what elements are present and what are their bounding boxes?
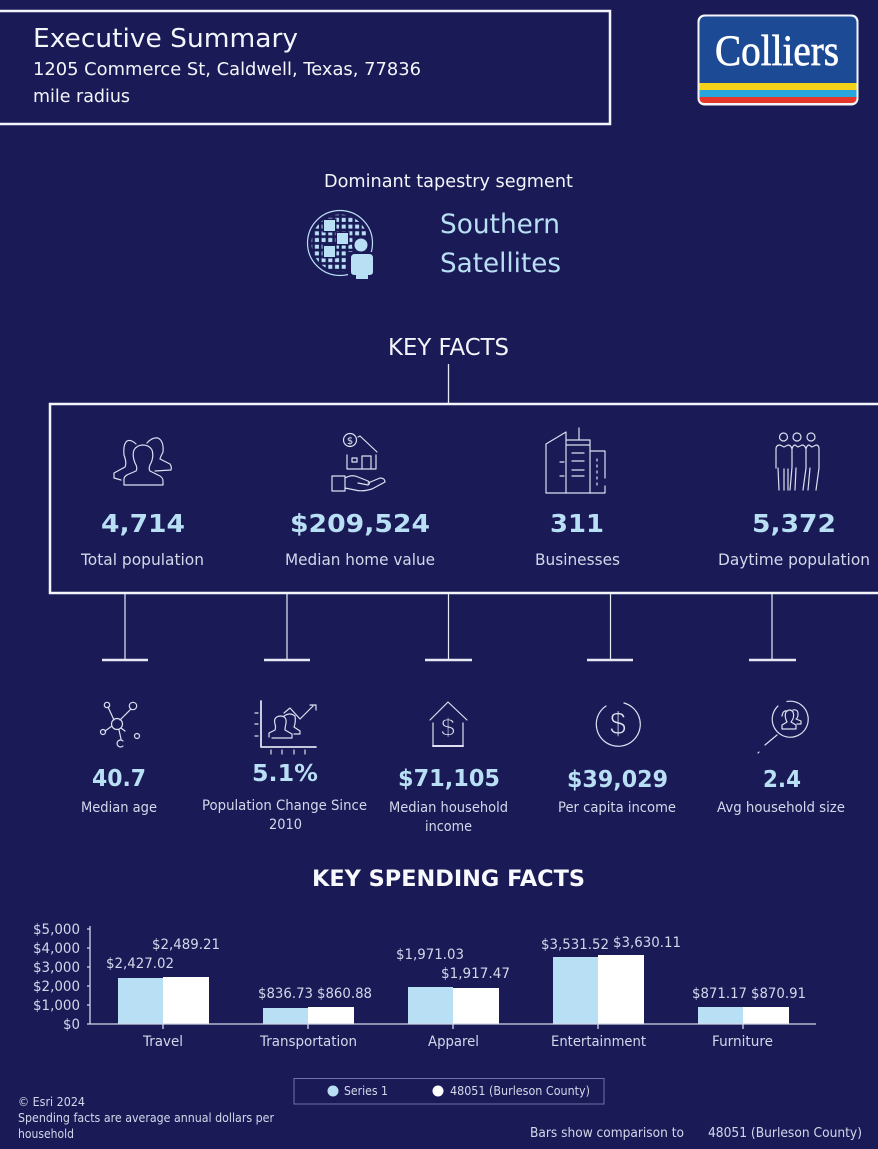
icon: house in hand: $ xyxy=(347,436,353,447)
data labels: $1,971.03 xyxy=(396,947,464,963)
icon: population growth chart xyxy=(255,701,316,754)
data labels: $1,917.47 xyxy=(441,966,510,982)
data labels: $836.73 xyxy=(258,986,313,1002)
stat: average household size: Avg household size xyxy=(717,800,845,816)
legend: 48051 (Burleson County) xyxy=(450,1084,590,1098)
tapestry segment name: Satellites xyxy=(440,248,561,279)
icon: network nodes xyxy=(100,702,140,747)
icon: office buildings xyxy=(546,428,605,493)
y axis labels: $1,000 xyxy=(33,998,80,1014)
icon: three people xyxy=(776,433,819,490)
stat: daytime population: Daytime population xyxy=(718,550,870,569)
data labels: $870.91 xyxy=(751,986,806,1002)
stat: daytime population: 5,372 xyxy=(752,509,836,538)
data labels: $3,531.52 xyxy=(541,937,609,953)
category labels: Transportation xyxy=(259,1034,357,1050)
stat: total population: Total population xyxy=(80,550,204,569)
logo: Colliers: Colliers xyxy=(715,28,839,75)
legend xyxy=(294,1078,604,1104)
comparison note xyxy=(530,1126,862,1141)
stat: median household income xyxy=(389,766,508,835)
data labels xyxy=(106,935,806,1002)
stat: per capita income xyxy=(558,767,676,816)
data labels: $3,630.11 xyxy=(613,935,681,951)
stat: population change: Population Change Since xyxy=(202,798,367,814)
stat: daytime population xyxy=(718,509,870,569)
key facts heading: KEY FACTS xyxy=(388,335,509,361)
stat: per capita income: $39,029 xyxy=(567,767,668,793)
legend: Series 1 xyxy=(344,1084,388,1098)
stat: average household size: 2.4 xyxy=(763,767,801,793)
tapestry segment name: Southern xyxy=(440,209,560,240)
connector: heading to panel xyxy=(448,364,450,403)
stat: population change: 2010 xyxy=(269,817,302,833)
heading: key spending facts: KEY SPENDING FACTS xyxy=(312,867,585,892)
data labels: $860.88 xyxy=(317,986,372,1002)
title: Executive Summary xyxy=(33,24,298,54)
stat: population change: 5.1% xyxy=(252,761,318,787)
comparison note: Bars show comparison to xyxy=(530,1126,684,1141)
connectors: panel to lower stats xyxy=(102,594,796,660)
icon: house in hand xyxy=(332,434,385,491)
stat: total population: 4,714 xyxy=(101,509,185,538)
stat: median age: Median age xyxy=(81,800,157,816)
stat: median household income: Median household xyxy=(389,800,508,816)
y axis labels: $5,000 xyxy=(33,922,80,938)
stat: median home value: Median home value xyxy=(285,550,435,569)
stat: population change xyxy=(202,761,367,833)
stat: median home value: $209,524 xyxy=(290,509,430,538)
icon: magnifier with people xyxy=(758,701,808,753)
stat: median home value xyxy=(285,509,435,569)
radius: mile radius xyxy=(33,86,130,107)
icon: globe and person xyxy=(308,210,376,282)
category labels: Apparel xyxy=(428,1034,479,1050)
bar chart: spending xyxy=(33,922,816,1050)
header panel xyxy=(0,11,610,124)
tapestry segment name xyxy=(440,209,561,279)
category labels: Furniture xyxy=(712,1034,773,1050)
y axis labels: $0 xyxy=(63,1017,80,1033)
stat: total population xyxy=(80,509,204,569)
y axis labels: $3,000 xyxy=(33,960,80,976)
y axis labels: $4,000 xyxy=(33,941,80,957)
icon: dollar coin xyxy=(596,703,640,746)
stat: median household income: income xyxy=(425,819,472,835)
stat: per capita income: Per capita income xyxy=(558,800,676,816)
series 1 bars xyxy=(118,957,743,1024)
comparison note: 48051 (Burleson County) xyxy=(708,1126,862,1141)
stat: businesses: Businesses xyxy=(535,550,620,569)
panel: key facts xyxy=(50,404,878,593)
category labels: Entertainment xyxy=(551,1034,646,1050)
tapestry heading: Dominant tapestry segment xyxy=(324,172,573,192)
icon: people group xyxy=(114,438,171,485)
stat: average household size xyxy=(717,767,845,816)
data labels: $871.17 xyxy=(692,986,747,1002)
y axis labels: $2,000 xyxy=(33,979,80,995)
stat: businesses: 311 xyxy=(550,509,604,538)
category labels xyxy=(142,1034,773,1050)
icon: house with dollar: $ xyxy=(441,714,455,742)
icon: house with dollar xyxy=(430,702,467,746)
stat: median age xyxy=(81,766,157,816)
address: 1205 Commerce St, Caldwell, Texas, 77836 xyxy=(33,59,421,80)
category labels: Travel xyxy=(142,1034,183,1050)
footnote xyxy=(18,1095,274,1141)
axes xyxy=(87,926,816,1029)
icon: dollar coin: $ xyxy=(610,705,626,742)
stat: median household income: $71,105 xyxy=(398,766,500,792)
stat: median age: 40.7 xyxy=(92,766,146,792)
county bars xyxy=(163,955,789,1024)
y axis labels xyxy=(33,922,80,1033)
footnote: © Esri 2024 xyxy=(18,1095,85,1109)
data labels: $2,489.21 xyxy=(152,937,220,953)
stat: businesses xyxy=(535,509,620,569)
footnote: household xyxy=(18,1127,74,1141)
data labels: $2,427.02 xyxy=(106,956,174,972)
footnote: Spending facts are average annual dollars per xyxy=(18,1111,274,1125)
logo: Colliers xyxy=(698,14,858,106)
